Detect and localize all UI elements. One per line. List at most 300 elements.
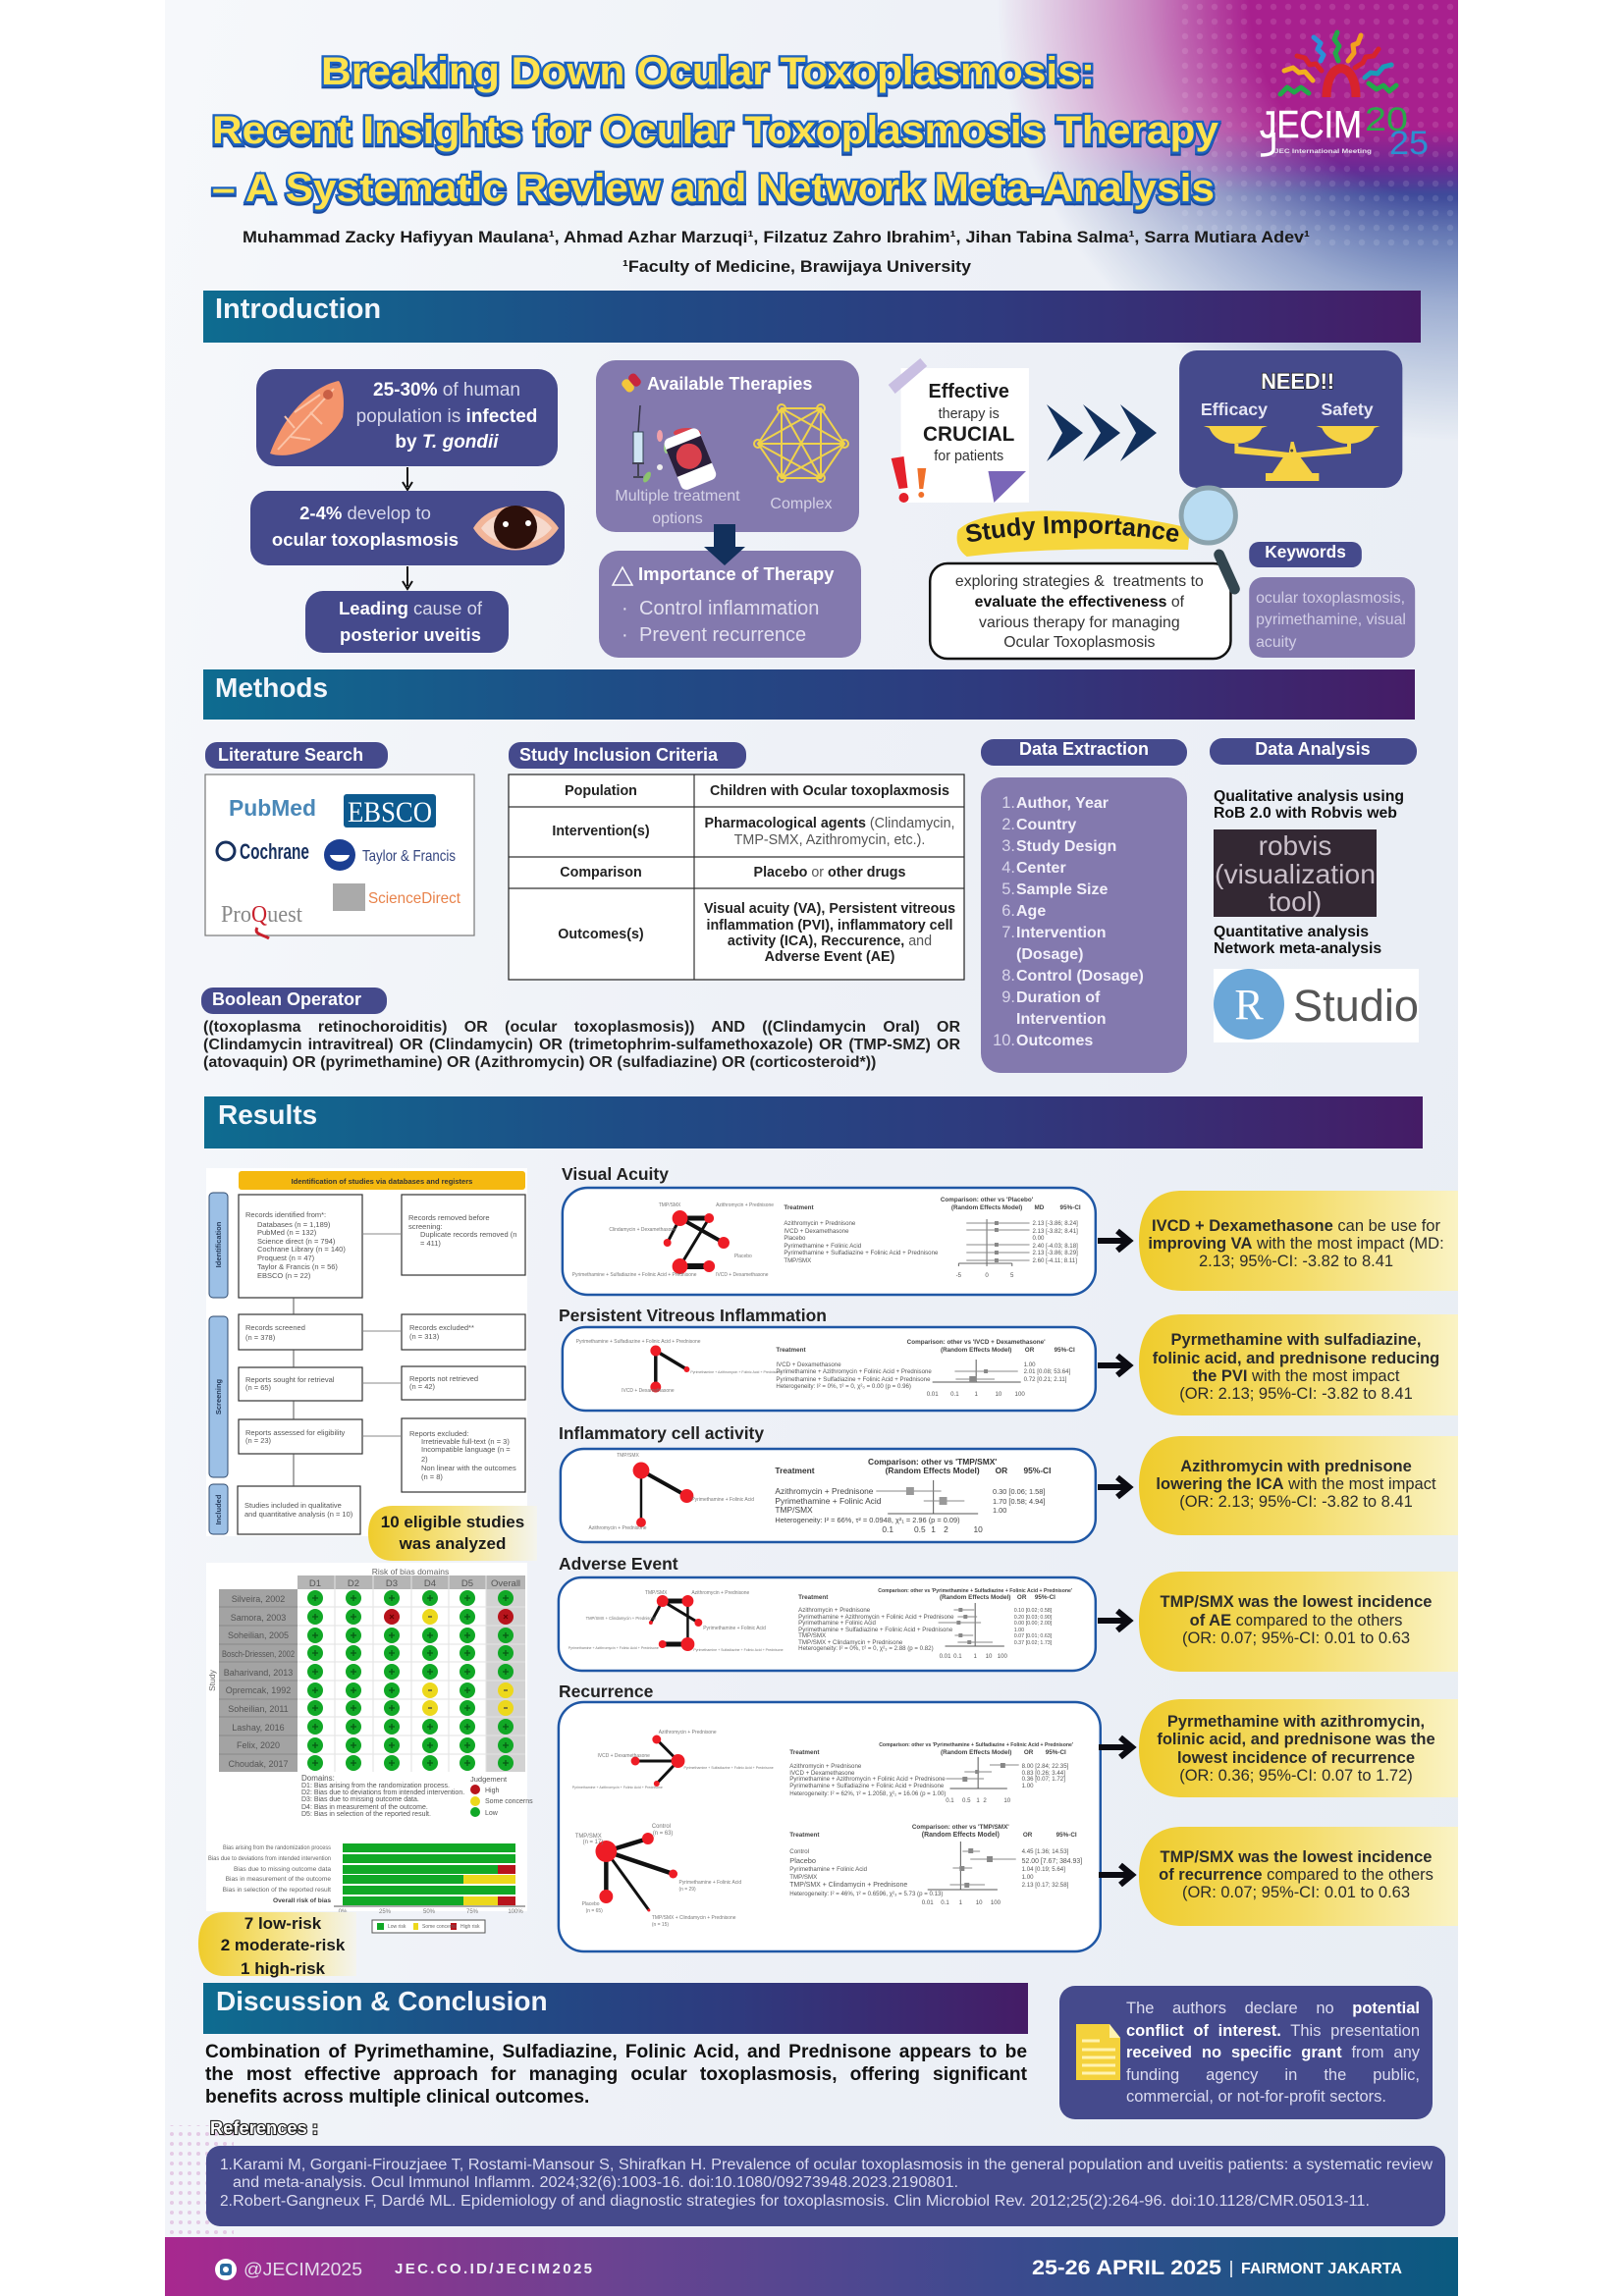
forest plot upper: 8.00 [2.84; 22.35] — [1022, 1763, 1069, 1770]
forest plot: Treatment — [776, 1347, 807, 1354]
panel: importance of therapy — [599, 551, 861, 658]
forest plot lower: TMP/SMX + Clindamycin + Prednisone — [789, 1882, 907, 1889]
chart: risk of bias summary bars: High risk — [460, 1924, 480, 1930]
panel: references: and meta-analysis. Ocul Immunol Inflamm. 2024;32(6):1003-16. doi:10.1080/09273948.2023.2190801. — [233, 2174, 958, 2191]
callout: recurrence finding 2: (OR: 0.07; 95%-CI: 0.01 to 0.63 — [1182, 1884, 1410, 1901]
panel: PVI chart — [563, 1327, 1096, 1411]
forest plot: 1 — [974, 1391, 978, 1398]
forest plot upper: Comparison: other vs 'Pyrimethamine + Sulfadiazine + Folinic Acid + Prednisone' — [879, 1742, 1073, 1748]
forest plot: TMP/SMX — [798, 1632, 826, 1639]
callout: recurrence finding 1: Pyrmethamine with azithromycin, — [1167, 1713, 1425, 1731]
chart: risk of bias traffic light: Lashay, 2016 — [232, 1723, 285, 1733]
forest plot: 2.13 [-3.82; 8.41] — [1033, 1228, 1078, 1235]
forest plot upper: 2 — [983, 1797, 987, 1804]
network plot: TMP/SMX — [645, 1590, 668, 1596]
chart: risk of bias traffic light: Low — [485, 1810, 499, 1817]
table: inclusion criteria: Placebo or other drugs — [754, 865, 906, 881]
panel: data extraction list — [981, 777, 1187, 1073]
keywords label — [1249, 542, 1362, 567]
callout: ICA finding: (OR: 2.13; 95%-CI: -3.82 to 8.41 — [1179, 1493, 1413, 1511]
top-right dot pattern — [1173, 0, 1458, 253]
network plot: Azithromycin + Prednisone — [589, 1525, 647, 1531]
section bar: Methods: Methods — [215, 672, 328, 703]
table: inclusion criteria: Pharmacological agents (Clindamycin, — [704, 816, 955, 831]
callout: risk summary: 1 high-risk — [241, 1959, 326, 1978]
chart: PRISMA flow diagram: Science direct (n = 794) — [257, 1237, 336, 1246]
chart: PRISMA flow diagram: Databases (n = 1,189) — [257, 1220, 331, 1229]
callout: visual acuity finding — [1139, 1191, 1458, 1291]
panel: database logos — [205, 774, 474, 938]
footer: 25-26 APRIL 2025 — [1032, 2257, 1221, 2279]
study importance banner: Study Importance — [966, 516, 1178, 542]
forest plot: 1 — [931, 1524, 936, 1534]
chart: PRISMA flow diagram: Proquest (n = 47) — [257, 1254, 315, 1262]
data extraction heading — [981, 739, 1187, 766]
data analysis heading: Data Analysis — [1255, 739, 1371, 759]
conclusion text — [205, 2042, 1027, 2108]
quantitative analysis text: Network meta-analysis — [1214, 940, 1381, 957]
conflict of interest text: received no specific grant from any — [1126, 2044, 1420, 2061]
study inclusion heading — [509, 742, 746, 769]
network plot: Pyrimethamine + Azithromycin + Folinic Acid + Prednisone — [690, 1370, 781, 1374]
forest plot: 100 — [998, 1653, 1008, 1660]
forest plot lower: 100 — [991, 1899, 1001, 1906]
forest plot upper: 95%-CI — [1046, 1749, 1066, 1756]
forest plot lower: 10 — [976, 1899, 983, 1906]
affiliation: ¹Faculty of Medicine, Brawijaya University — [622, 257, 972, 276]
chart: risk of bias traffic light: Risk of bias domains — [372, 1567, 449, 1576]
icon: magnifier — [1181, 488, 1235, 589]
callout: recurrence finding 1 — [1139, 1699, 1458, 1797]
network plot: IVCD + Dexamethasone — [622, 1388, 675, 1394]
forest plot lower: Heterogeneity: I² = 46%, τ² = 0.6596, χ²₃ = 5.73 (p = 0.13) — [789, 1891, 943, 1897]
table: inclusion criteria: Intervention(s) — [552, 824, 650, 839]
panel: database logos: PubMed — [229, 795, 316, 821]
forest plot lower: 1.04 [0.19; 5.64] — [1022, 1866, 1065, 1873]
network plot: Pyrimethamine + Folinic Acid — [691, 1497, 754, 1503]
forest plot lower — [789, 1824, 1082, 1906]
chart: risk of bias traffic light: D2 — [348, 1578, 359, 1589]
panel: data extraction list: 10. — [993, 1032, 1015, 1049]
panel: importance of therapy: · — [622, 624, 628, 646]
panel: data extraction list: Study Design — [1016, 838, 1116, 855]
quantitative analysis text: Quantitative analysis — [1214, 924, 1369, 940]
conclusion text: Combination of Pyrimethamine, Sulfadiazine, Folinic Acid, and Prednisone appears to be — [205, 2042, 1027, 2062]
panel: references — [206, 2146, 1445, 2226]
chart: PRISMA flow diagram: 2) — [421, 1455, 428, 1464]
forest plot upper: (Random Effects Model) — [941, 1749, 1011, 1756]
chart: PRISMA flow diagram: Taylor & Francis (n = 56) — [257, 1262, 338, 1271]
arrow — [403, 566, 412, 589]
chart: risk of bias traffic light: Choudak, 2017 — [228, 1759, 289, 1769]
section bar: Discussion and Conclusion: Discussion & Conclusion — [216, 1986, 548, 2016]
chart: PRISMA flow diagram: Identification of studies via databases and registers — [292, 1177, 472, 1186]
callout: ICA finding — [1139, 1436, 1458, 1535]
panel: database logos: Cochrane — [240, 839, 309, 864]
poster background — [165, 0, 1458, 2296]
chart: risk of bias summary bars: 0% — [339, 1909, 348, 1915]
forest plot upper: 1.00 — [1022, 1783, 1034, 1789]
panel: data extraction list: 2. — [1001, 816, 1015, 833]
forest plot: TMP/SMX — [775, 1505, 813, 1515]
chart: risk of bias summary bars: Bias due to missing outcome data — [234, 1866, 331, 1873]
study inclusion heading: Study Inclusion Criteria — [519, 745, 719, 765]
chart: risk of bias summary bars: 100% — [508, 1909, 523, 1915]
boolean operator heading — [201, 988, 387, 1014]
panel: database logos: Taylor & Francis — [362, 848, 456, 865]
callout: visual acuity finding: improving VA with the most impact (MD: — [1148, 1235, 1444, 1253]
intro box: infection rate: 25-30% of human — [373, 380, 520, 400]
forest plot: (Random Effects Model) — [886, 1466, 980, 1475]
chart: risk of bias summary bars: Some concerns — [422, 1924, 457, 1930]
forest plot upper: IVCD + Dexamethasone — [789, 1770, 855, 1777]
section bar: Discussion and Conclusion — [203, 1983, 1028, 2034]
icon: parasite — [270, 381, 344, 455]
forest plot: 2.01 [0.08; 53.64] — [1024, 1368, 1071, 1375]
forest plot lower: OR — [1023, 1832, 1033, 1839]
footer: JEC.CO.ID/JECIM2025 — [395, 2261, 592, 2277]
forest plot lower: 52.00 [7.67; 384.93] — [1022, 1858, 1082, 1865]
chart: PRISMA flow diagram: Irretrievable full-text (n = 3) — [421, 1437, 510, 1446]
panel: effective note: for patients — [934, 449, 1003, 464]
chart: PRISMA flow diagram: Reports excluded: — [409, 1429, 468, 1438]
panel: effective note: Effective — [929, 381, 1009, 402]
chart: PRISMA flow diagram: (n = 8) — [421, 1472, 443, 1481]
robvis logo: (visualization — [1215, 859, 1376, 889]
conflict of interest text: conflict of interest. This presentation — [1126, 2022, 1420, 2040]
panel: data extraction list: Duration of — [1016, 989, 1101, 1006]
callout: adverse event finding: (OR: 0.07; 95%-CI: 0.01 to 0.63 — [1182, 1629, 1410, 1647]
chart: risk of bias traffic light: D5 — [461, 1578, 473, 1589]
chart: risk of bias traffic light: Soheilian, 2011 — [228, 1704, 289, 1714]
network plot lower: TMP/SMX + Clindamycin + Prednisone — [652, 1915, 736, 1921]
icon: syringe and medicine — [632, 405, 718, 492]
intro box: uveitis: posterior uveitis — [340, 624, 481, 645]
network plot: IVCD + Dexamethasone — [716, 1272, 769, 1278]
forest plot: 1.00 — [1014, 1628, 1024, 1633]
chart: risk of bias traffic light: High — [485, 1788, 500, 1794]
chart: risk of bias traffic light: D3 — [386, 1578, 398, 1589]
chart: PRISMA flow diagram: (n = 42) — [409, 1382, 436, 1391]
arrow — [1099, 1865, 1132, 1885]
forest plot upper: 0.5 — [962, 1797, 971, 1804]
network plot lower: (n = 65) — [586, 1908, 603, 1914]
chart: PRISMA flow diagram: Identification — [214, 1221, 223, 1267]
chart: PRISMA flow diagram: Reports assessed for eligibility — [245, 1428, 346, 1437]
chart: PRISMA flow diagram: Reports sought for retrieval — [245, 1375, 335, 1384]
arrow — [1098, 1231, 1129, 1251]
panel: available therapies — [596, 360, 859, 532]
callout: eligible studies: was analyzed — [399, 1534, 506, 1553]
network plot lower: Placebo — [582, 1901, 600, 1907]
forest plot: (Random Effects Model) — [951, 1204, 1022, 1211]
network plot lower — [575, 1824, 741, 1928]
RStudio logo: R — [1234, 981, 1264, 1029]
forest plot lower: TMP/SMX — [789, 1874, 817, 1881]
callout: recurrence finding 2: of recurrence compared to the others — [1159, 1866, 1434, 1884]
forest plot: IVCD + Dexamethasone — [776, 1362, 841, 1368]
table: inclusion criteria: Visual acuity (VA), Persistent vitreous — [704, 901, 955, 917]
table: inclusion criteria: activity (ICA), Reccurence, and — [728, 934, 932, 949]
table: inclusion criteria: inflammation (PVI), inflammatory cell — [706, 918, 953, 934]
table: inclusion criteria: TMP-SMX, Azithromycin, etc.). — [734, 832, 925, 848]
forest plot upper: Pyrimethamine + Azithromycin + Folinic Acid + Prednisone — [789, 1776, 946, 1783]
callout: recurrence finding 2: TMP/SMX was the lowest incidence — [1161, 1848, 1432, 1866]
forest plot: Pyrimethamine + Folinic Acid — [798, 1620, 877, 1627]
network plot: Pyrimethamine + Azithromycin + Folinic Acid + Prednisone — [568, 1646, 659, 1650]
forest plot: Heterogeneity: I² = 0%, τ² = 0, χ²₃ = 2.88 (p = 0.82) — [798, 1645, 934, 1652]
chart: PRISMA flow diagram: Incompatible language (n = — [421, 1445, 511, 1454]
panel: keywords: pyrimethamine, visual — [1256, 612, 1406, 628]
panel: data extraction list: Author, Year — [1016, 795, 1109, 812]
chart: PRISMA flow diagram: and quantitative analysis (n = 10) — [244, 1510, 353, 1519]
network plot lower: (n = 63) — [653, 1831, 673, 1837]
callout: PVI finding — [1139, 1314, 1458, 1415]
forest plot: (Random Effects Model) — [940, 1594, 1010, 1601]
forest plot: OR — [1017, 1594, 1027, 1601]
network plot: Pyrimethamine + Sulfadiazine + Folinic Acid + Prednisone — [572, 1272, 697, 1278]
panel: effective note: therapy is — [939, 406, 1000, 422]
forest plot lower: Treatment — [789, 1832, 820, 1839]
forest plot: 0.30 [0.06; 1.58] — [993, 1487, 1045, 1496]
forest plot: 100 — [1015, 1391, 1025, 1398]
forest plot: 2.13 [-3.86; 8.29] — [1033, 1250, 1078, 1256]
forest plot lower: 4.45 [1.36; 14.53] — [1022, 1848, 1069, 1855]
icon: exclamation marks — [892, 456, 926, 503]
RStudio logo — [1214, 969, 1419, 1042]
panel: importance of therapy: Importance of Therapy — [638, 563, 835, 584]
icon: document — [1076, 2024, 1120, 2080]
robvis logo: robvis — [1259, 830, 1331, 861]
chart: risk of bias summary bars: Low risk — [388, 1924, 406, 1930]
forest plot — [784, 1197, 1081, 1279]
authors: Muhammad Zacky Hafiyyan Maulana¹, Ahmad Azhar Marzuqi¹, Filzatuz Zahro Ibrahim¹, Jihan Tabina Salma¹, Sarra Mutiara Adev¹ — [243, 229, 1310, 246]
network plot lower: (n = 29) — [679, 1887, 696, 1893]
forest plot: 1.00 — [1024, 1362, 1036, 1368]
network plot: TMP/SMX — [617, 1453, 639, 1459]
heading: recurrence: Recurrence — [559, 1682, 654, 1701]
conflict of interest text: The authors declare no potential — [1126, 2000, 1420, 2017]
panel: effective note — [889, 358, 1029, 503]
chart: risk of bias traffic light: D1: Bias arising from the randomization process. — [301, 1783, 450, 1789]
footer: @JECIM2025 — [243, 2260, 362, 2279]
icon: balance scale — [1204, 426, 1380, 481]
panel: database logos: ProQuest — [221, 902, 302, 928]
callout: adverse event finding: TMP/SMX was the lowest incidence — [1161, 1593, 1432, 1611]
forest plot lower: 0.01 — [922, 1899, 934, 1906]
footer: FAIRMONT JAKARTA — [1241, 2261, 1402, 2277]
robvis logo: tool) — [1269, 886, 1322, 917]
footer — [165, 2237, 1458, 2296]
section bar: Methods — [203, 669, 1415, 720]
network plot: Azithromycin + Prednisone — [716, 1202, 774, 1208]
forest plot: 0.00 — [1033, 1235, 1045, 1242]
chart: PRISMA flow diagram: screening: — [408, 1222, 443, 1231]
callout: recurrence finding 1: lowest incidence of recurrence — [1177, 1749, 1415, 1767]
forest plot: Pyrimethamine + Azithromycin + Folinic Acid + Prednisone — [776, 1368, 932, 1375]
chart: risk of bias traffic light: Soheilian, 2005 — [228, 1630, 289, 1640]
title: – A Systematic Review and Network Meta-Analysis — [212, 167, 1215, 210]
chart: risk of bias traffic light: Judgement — [470, 1775, 508, 1784]
forest plot: 95%-CI — [1055, 1347, 1075, 1354]
forest plot: 2.60 [-4.11; 8.11] — [1033, 1257, 1077, 1264]
conflict of interest text — [1126, 2000, 1420, 2106]
intro box: ocular development: 2-4% develop to — [299, 503, 431, 523]
forest plot: Treatment — [784, 1204, 814, 1211]
literature search heading: Literature Search — [218, 745, 363, 765]
forest plot: Comparison: other vs 'Placebo' — [941, 1197, 1034, 1203]
forest plot: 0.01 — [940, 1653, 951, 1660]
forest plot: Comparison: other vs 'TMP/SMX' — [868, 1457, 997, 1467]
conflict of interest text: commercial, or not-for-profit sectors. — [1126, 2088, 1386, 2106]
literature search heading — [205, 742, 388, 769]
network plot lower: (n = 15) — [652, 1922, 669, 1928]
panel: recurrence charts — [559, 1702, 1101, 1951]
chart: PRISMA flow diagram: Records screened — [245, 1323, 305, 1332]
forest plot — [776, 1339, 1075, 1398]
forest plot: 95%-CI — [1035, 1594, 1055, 1601]
panel: need efficacy and safety: Efficacy — [1201, 400, 1268, 419]
table: inclusion criteria: Population — [565, 783, 637, 799]
chart: risk of bias traffic light: Bosch-Driessen, 2002 — [222, 1649, 295, 1659]
network plot upper: Azithromycin + Prednisone — [659, 1730, 717, 1735]
panel: references: Karami M, Gorgani-Firouzjaee T, Rostami-Mansour S, Shirafkan H. Prevalence of ocular toxoplasmosis in the general population and uveitis patients: a systematic review — [233, 2157, 1434, 2173]
network plot upper: IVCD + Dexamethasone — [597, 1753, 650, 1759]
network plot lower: (n = 17) — [583, 1840, 603, 1845]
forest plot upper: 10 — [1003, 1797, 1011, 1804]
network plot — [572, 1202, 774, 1278]
panel: importance of therapy: Control inflammation — [639, 598, 819, 619]
heading: inflammatory cell activity: Inflammatory cell activity — [559, 1423, 764, 1443]
chart: risk of bias summary bars: Bias in selection of the reported result — [223, 1887, 331, 1894]
forest plot: 2.13 [-3.86; 8.24] — [1033, 1220, 1078, 1227]
boolean operator heading: Boolean Operator — [212, 989, 361, 1009]
logo: JECIM 2025: JECIM — [1260, 104, 1362, 146]
forest plot upper: 1 — [976, 1797, 980, 1804]
network plot lower: Pyrimethamine + Folinic Acid — [679, 1880, 741, 1886]
panel: references: 2. — [220, 2193, 233, 2210]
forest plot: TMP/SMX + Clindamycin + Prednisone — [798, 1639, 903, 1646]
icon: network — [754, 404, 848, 482]
chart: risk of bias summary bars: Bias in measurement of the outcome — [226, 1876, 331, 1883]
forest plot upper — [789, 1742, 1073, 1804]
forest plot: 10 — [973, 1524, 983, 1534]
forest plot: 0.10 [0.02; 0.58] — [1014, 1608, 1053, 1614]
chart: PRISMA flow diagram: Screening — [214, 1378, 223, 1415]
logo: JECIM 2025 — [1260, 32, 1429, 162]
keywords label: Keywords — [1265, 542, 1346, 561]
forest plot: 10 — [996, 1391, 1002, 1398]
forest plot: TMP/SMX — [784, 1257, 811, 1264]
forest plot: Heterogeneity: I² = 66%, τ² = 0.0948, χ²₁ = 2.96 (p = 0.09) — [775, 1516, 960, 1524]
network plot: Azithromycin + Prednisone — [691, 1590, 750, 1596]
panel: data extraction list: Country — [1016, 817, 1076, 833]
callout: adverse event finding: of AE compared to the others — [1190, 1612, 1402, 1629]
forest plot: Treatment — [775, 1466, 815, 1475]
forest plot lower: Pyrimethamine + Folinic Acid — [789, 1866, 868, 1873]
chart: PRISMA flow diagram: Cochrane Library (n = 140) — [257, 1245, 346, 1254]
chart: risk of bias traffic light: Samora, 2003 — [231, 1613, 286, 1623]
forest plot lower: 1 — [959, 1899, 963, 1906]
arrow: chevrons — [1047, 404, 1157, 461]
forest plot: (Random Effects Model) — [941, 1347, 1011, 1354]
chart: PRISMA flow diagram: Included — [214, 1494, 223, 1524]
chart: risk of bias traffic light: Overall — [491, 1578, 520, 1589]
forest plot upper: Treatment — [789, 1749, 820, 1756]
forest plot: Pyrimethamine + Sulfadiazine + Folinic Acid + Prednisone — [776, 1376, 931, 1383]
forest plot lower: (Random Effects Model) — [922, 1832, 1000, 1839]
forest plot: Pyrimethamine + Azithromycin + Folinic Acid + Prednisone — [798, 1614, 954, 1621]
section bar: Results: Results — [218, 1099, 317, 1130]
panel: data extraction list: 9. — [1001, 988, 1015, 1006]
forest plot — [798, 1588, 1072, 1660]
callout: risk summary: 7 low-risk — [244, 1914, 322, 1933]
icon: warning triangle — [613, 567, 632, 585]
chart: risk of bias traffic light: Felix, 2020 — [237, 1740, 280, 1750]
network plot: Pyrimethamine + Sulfadiazine + Folinic Acid + Prednisone — [693, 1648, 784, 1652]
chart: risk of bias traffic light: Some concerns — [485, 1798, 533, 1805]
forest plot: 1.70 [0.58; 4.94] — [993, 1497, 1045, 1506]
forest plot: 2 — [944, 1524, 948, 1534]
panel: available therapies: Available Therapies — [647, 374, 812, 394]
chart: PRISMA flow diagram: (n = 23) — [245, 1436, 272, 1445]
chart: risk of bias summary bars: 50% — [423, 1909, 436, 1915]
callout: PVI finding: the PVI with the most impact — [1193, 1367, 1400, 1385]
panel: references: Robert-Gangneux F, Dardé ML. Epidemiology of and diagnostic strategies for toxoplasmosis. Clin Microbiol Rev. 2012;25(2):264-96. doi:10.1128/CMR.05013-11. — [233, 2193, 1370, 2210]
network plot upper: Pyrimethamine + Sulfadiazine + Folinic Acid + Prednisone — [683, 1766, 774, 1770]
network plot lower: TMP/SMX — [575, 1834, 602, 1840]
network plot: Placebo — [734, 1254, 752, 1259]
forest plot upper: OR — [1024, 1749, 1034, 1756]
chart: risk of bias traffic light — [206, 1563, 533, 1911]
section bar: Introduction: Introduction — [215, 294, 381, 325]
logo: JECIM 2025: 25 — [1389, 125, 1429, 162]
panel: keywords: ocular toxoplasmosis, — [1256, 590, 1405, 607]
network plot — [576, 1339, 781, 1394]
forest plot: Pyrimethamine + Folinic Acid — [784, 1243, 862, 1250]
forest plot: -5 — [956, 1272, 962, 1279]
forest plot: Azithromycin + Prednisone — [798, 1607, 871, 1614]
panel: data extraction list: 7. — [1001, 924, 1015, 941]
icon: capsule — [621, 372, 642, 394]
panel: need efficacy and safety: Safety — [1321, 400, 1374, 419]
panel: data extraction list: Outcomes — [1016, 1033, 1093, 1049]
panel: visual acuity chart — [563, 1188, 1096, 1295]
forest plot upper: 0.1 — [946, 1797, 954, 1804]
intro box: uveitis: Leading cause of — [339, 598, 483, 618]
chart: risk of bias traffic light: D5: Bias in selection of the reported result. — [301, 1811, 431, 1818]
panel: data extraction list: 6. — [1001, 902, 1015, 920]
forest plot: 0.5 — [914, 1524, 926, 1534]
callout: recurrence finding 1: folinic acid, and prednisone was the — [1157, 1731, 1435, 1748]
forest plot: 1 — [973, 1653, 977, 1660]
panel: data extraction list: Sample Size — [1016, 881, 1108, 898]
chart: PRISMA flow diagram: (n = 65) — [245, 1383, 272, 1392]
boolean operator text: ((toxoplasma retinochoroiditis) OR (ocular toxoplasmosis)) AND ((Clindamycin Oral) OR — [203, 1019, 960, 1036]
chart: risk of bias traffic light: Opremcak, 1992 — [226, 1685, 291, 1695]
callout: ICA finding: Azithromycin with prednisone — [1180, 1458, 1412, 1475]
callout: adverse event finding — [1139, 1572, 1458, 1672]
intro box: ocular development: ocular toxoplasmosis — [272, 529, 459, 550]
chart: risk of bias summary bars: 75% — [466, 1909, 479, 1915]
data analysis heading — [1210, 738, 1417, 765]
network plot: Clindamycin + Dexamethasone — [609, 1227, 676, 1233]
panel: study importance text — [930, 563, 1230, 659]
panel: data extraction list: Intervention — [1016, 1011, 1107, 1028]
chart: risk of bias traffic light: D1 — [309, 1578, 321, 1589]
network plot — [568, 1590, 784, 1652]
network plot: TMP/SMX + Clindamycin + Prednisone — [586, 1616, 657, 1621]
